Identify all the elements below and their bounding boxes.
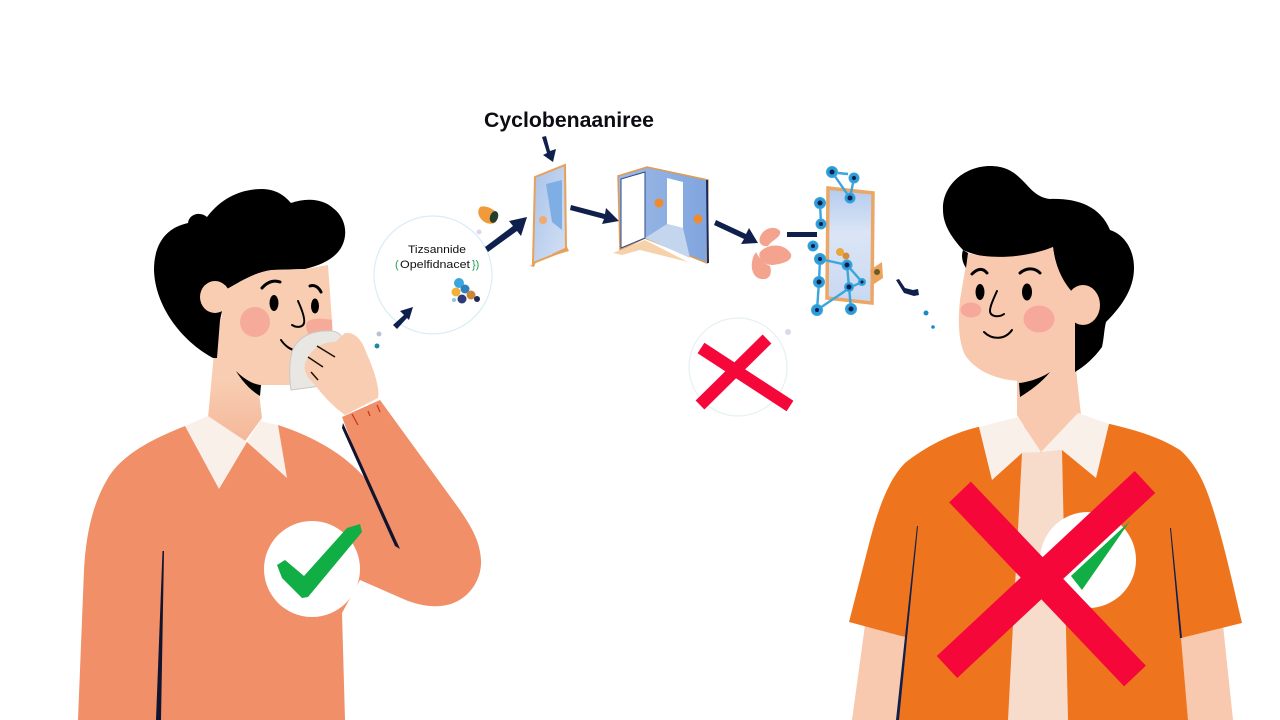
right shirt — [849, 424, 1242, 720]
arrow: label to panel — [542, 136, 556, 162]
small dots near left arrow — [374, 332, 382, 348]
left face — [217, 265, 333, 384]
right facial features — [972, 269, 1040, 338]
left facial features — [262, 281, 321, 350]
red cross — [700, 339, 790, 406]
left neck — [208, 280, 290, 448]
network nodes — [808, 166, 866, 316]
right hair side sliver — [962, 250, 968, 268]
right cheeks — [960, 302, 1054, 332]
circle: Tizanidine callout — [374, 216, 492, 334]
small capsule icon — [476, 206, 500, 234]
arrow: panel two to organ — [714, 220, 758, 244]
right ear — [1066, 285, 1100, 325]
right collar — [979, 413, 1109, 480]
network bonds — [817, 172, 862, 310]
tissue — [290, 331, 343, 390]
callout subtext: Opelfidnacet — [400, 259, 470, 271]
warning circle with red cross — [689, 318, 791, 416]
right shirt side seams — [896, 526, 1182, 720]
hand finger lines — [308, 346, 335, 380]
arrow: organ to network panel — [787, 232, 817, 237]
faint connector dot — [785, 329, 791, 335]
right green brackets: }) — [472, 259, 479, 271]
kidney shaped organ — [752, 228, 791, 279]
left jaw shadow — [236, 371, 261, 396]
right person: warned against medication — [849, 166, 1242, 720]
left sweater body and raised arm — [78, 400, 481, 720]
right badge with covered check — [1040, 512, 1136, 608]
small blue dots — [924, 310, 935, 329]
right neck — [1017, 360, 1081, 453]
arrow: callout to panel one — [485, 217, 527, 252]
right hair — [943, 166, 1134, 372]
left ear — [200, 281, 230, 313]
big red cross — [947, 482, 1145, 676]
callout text: Tizsannide — [408, 244, 466, 256]
left shirt collar — [185, 416, 287, 489]
approved badge with check mark — [264, 521, 362, 617]
panel three: door with molecular network — [808, 166, 883, 316]
orange molecule clusters — [836, 248, 883, 284]
left hand — [305, 333, 378, 415]
panel two: open door — [613, 167, 708, 263]
right arms — [852, 625, 1233, 720]
arrow: mouth to callout — [393, 307, 413, 329]
shirt placket — [1008, 450, 1068, 720]
small dark key icon — [896, 279, 919, 296]
left hair — [154, 189, 345, 358]
left cheeks — [240, 307, 332, 337]
right face — [959, 247, 1075, 381]
title label: Cyclobenaaniree — [484, 109, 654, 132]
right jaw shadow — [1019, 372, 1050, 397]
green brackets: ( — [395, 259, 399, 271]
left sweater front seam — [156, 551, 164, 720]
panel one: narrow door — [530, 165, 569, 267]
molecule cluster — [452, 278, 480, 304]
node centres — [811, 170, 864, 312]
sleeve cuff marks — [352, 405, 380, 425]
arrow: panel one to panel two — [570, 205, 619, 224]
left person: taking medication — [78, 189, 481, 720]
left sweater armhole line — [342, 423, 400, 549]
